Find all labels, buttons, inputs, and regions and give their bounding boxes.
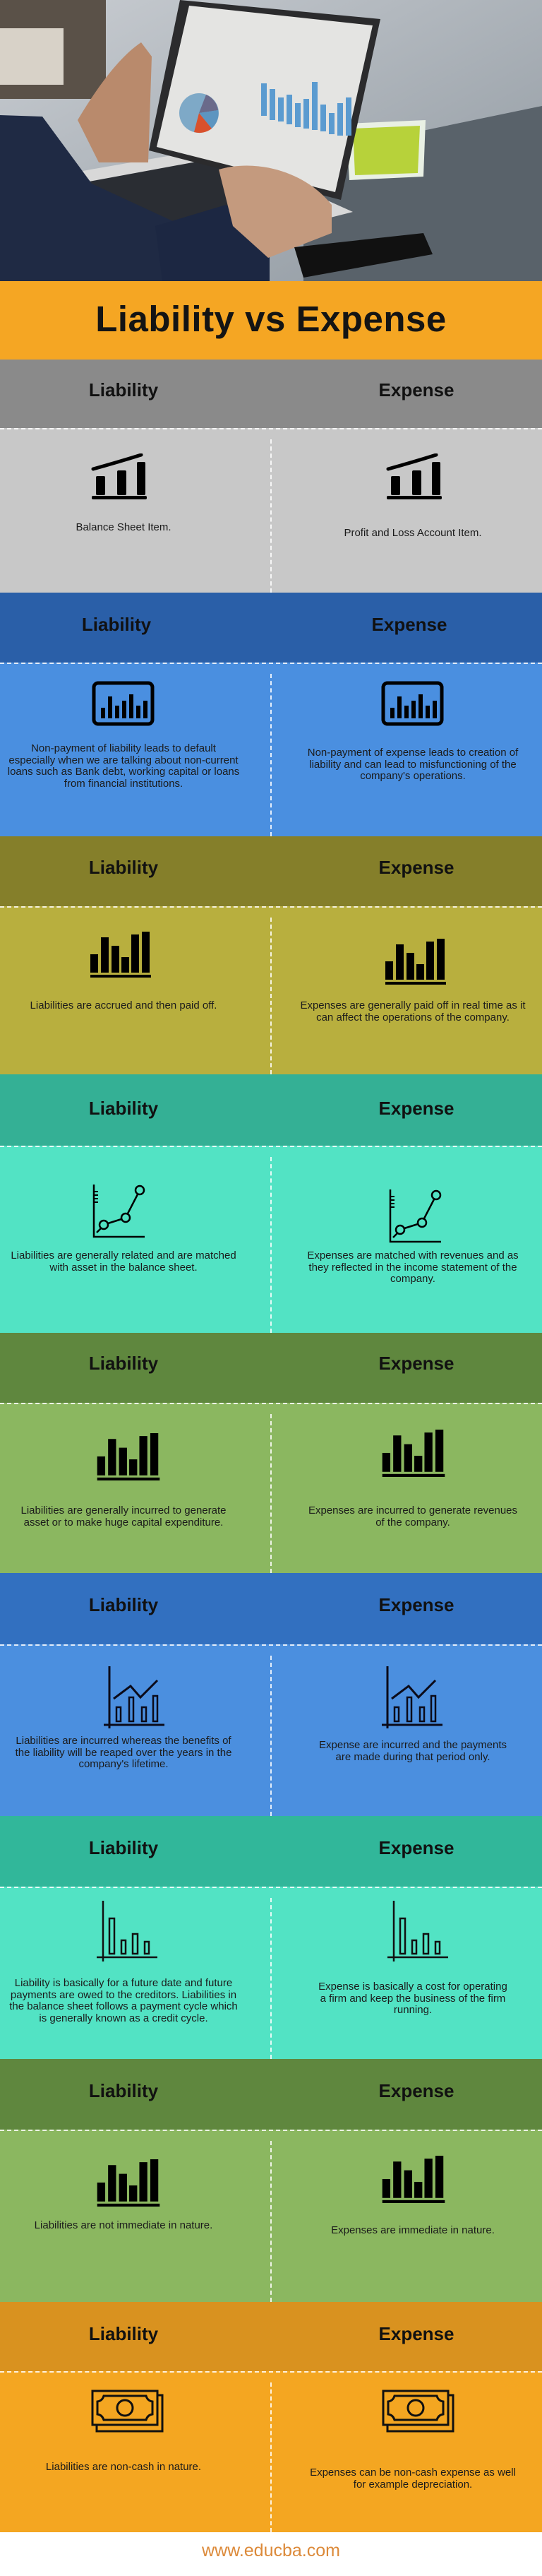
text left: Liabilities are accrued and then paid off. bbox=[30, 999, 217, 1011]
text right: Expenses are incurred to generate revenues of the company. bbox=[308, 1504, 517, 1529]
header row 8: Expense bbox=[379, 2080, 454, 2101]
icon: monitor chart left bbox=[92, 681, 154, 726]
section 4: matched with asset vs revenues bbox=[0, 1074, 542, 1333]
body row 9 bbox=[0, 2371, 542, 2532]
text left: Liability is basically for a future date and future payments are owed to the creditors. Liabilities in the balance sheet follows a payment cycle which is generally known as a credit cycle. bbox=[9, 1977, 238, 2024]
header row 8 bbox=[0, 2059, 542, 2130]
section 5: capital expenditure vs revenues bbox=[0, 1333, 542, 1573]
header row 9 bbox=[0, 2302, 542, 2371]
header row 7: Liability bbox=[89, 1837, 158, 1858]
text right: Expense is basically a cost for operating a firm and keep the business of the firm running. bbox=[318, 1981, 507, 2016]
body row 2 bbox=[0, 663, 542, 836]
header row 9: Liability bbox=[89, 2323, 158, 2344]
section 1: balance sheet vs P&L bbox=[0, 360, 542, 593]
header row 6: Liability bbox=[89, 1594, 158, 1615]
header photo: laptop with charts bbox=[0, 0, 542, 281]
icon: bar chart right bbox=[383, 2156, 445, 2203]
section 6: benefits reaped vs period only bbox=[0, 1573, 542, 1816]
header row 5: Liability bbox=[89, 1353, 158, 1374]
icon: banknotes right bbox=[383, 2390, 454, 2433]
body row 7 bbox=[0, 1887, 542, 2059]
header row 5: Expense bbox=[379, 1353, 454, 1374]
text right: Expenses are matched with revenues and as they reflected in the income statement of the company. bbox=[307, 1250, 519, 1285]
text left: Liabilities are incurred whereas the benefits of the liability will be reaped over the years in the company's lifetime. bbox=[16, 1735, 231, 1770]
text left: Liabilities are non-cash in nature. bbox=[46, 2461, 201, 2473]
header row 3: Liability bbox=[89, 857, 158, 878]
body row 8 bbox=[0, 2130, 542, 2302]
text right: Expenses are immediate in nature. bbox=[331, 2224, 495, 2236]
text left: Liabilities are generally related and are matched with asset in the balance sheet. bbox=[11, 1250, 236, 1273]
header row 1 bbox=[0, 360, 542, 428]
section 8: immediacy bbox=[0, 2059, 542, 2302]
text left: Liabilities are generally incurred to generate asset or to make huge capital expenditure. bbox=[20, 1504, 226, 1529]
icon: axis chart with trend right bbox=[382, 1666, 442, 1728]
icon: line chart right bbox=[390, 1189, 442, 1243]
icon: bar chart right bbox=[385, 939, 446, 985]
header row 2: Liability bbox=[82, 614, 151, 635]
header row 6: Expense bbox=[379, 1594, 454, 1615]
icon: outline bars left bbox=[97, 1901, 157, 1961]
icon: rising bar chart right bbox=[387, 453, 442, 499]
text right: Expenses are generally paid off in real time as it can affect the operations of the company. bbox=[300, 999, 526, 1023]
header row 1: Liability bbox=[89, 379, 158, 400]
footer: website: www.educba.com bbox=[202, 2541, 340, 2560]
text left: Balance Sheet Item. bbox=[76, 521, 171, 533]
header row 4: Expense bbox=[379, 1098, 454, 1119]
body row 6 bbox=[0, 1644, 542, 1816]
icon: bar chart left bbox=[97, 1433, 159, 1480]
icon: banknotes left bbox=[92, 2390, 164, 2433]
header row 8: Liability bbox=[89, 2080, 158, 2101]
icon: bar chart right bbox=[383, 1430, 445, 1477]
body row 1 bbox=[0, 428, 542, 593]
section 9: cash nature bbox=[0, 2302, 542, 2532]
icon: axis chart with trend left bbox=[104, 1666, 164, 1728]
header row 4: Liability bbox=[89, 1098, 158, 1119]
header row 3 bbox=[0, 836, 542, 906]
icon: bar chart left bbox=[90, 932, 151, 978]
text right: Non-payment of expense leads to creation of liability and can lead to misfunctioning of the company's operations. bbox=[308, 747, 518, 782]
title banner bbox=[0, 281, 542, 360]
text left: Liabilities are not immediate in nature. bbox=[35, 2219, 212, 2231]
header row 7 bbox=[0, 1816, 542, 1887]
section 3: accrued vs real time bbox=[0, 836, 542, 1074]
icon: monitor chart right bbox=[381, 681, 443, 726]
header row 3: Expense bbox=[379, 857, 454, 878]
text left: Non-payment of liability leads to default especially when we are talking about non-current loans such as Bank debt, working capital or loans from financial institutions. bbox=[8, 742, 239, 790]
header row 2 bbox=[0, 593, 542, 663]
body row 5 bbox=[0, 1403, 542, 1573]
header row 6 bbox=[0, 1573, 542, 1644]
icon: outline bars right bbox=[387, 1901, 448, 1961]
header row 1: Expense bbox=[379, 379, 454, 400]
body row 4 bbox=[0, 1146, 542, 1333]
header row 4 bbox=[0, 1074, 542, 1146]
header row 9: Expense bbox=[379, 2323, 454, 2344]
section 7: future date vs cost bbox=[0, 1816, 542, 2059]
header row 7: Expense bbox=[379, 1837, 454, 1858]
text right: Profit and Loss Account Item. bbox=[344, 527, 482, 539]
body row 3 bbox=[0, 906, 542, 1074]
text right: Expenses can be non-cash expense as well for example depreciation. bbox=[310, 2467, 516, 2491]
header row 2: Expense bbox=[372, 614, 447, 635]
icon: rising bar chart left bbox=[92, 453, 147, 499]
header row 5 bbox=[0, 1333, 542, 1403]
icon: bar chart left bbox=[97, 2159, 159, 2207]
title banner: Liability vs Expense bbox=[95, 299, 447, 339]
section 2: non-payment bbox=[0, 593, 542, 836]
icon: line chart left bbox=[93, 1185, 145, 1237]
text right: Expense are incurred and the payments are made during that period only. bbox=[319, 1739, 507, 1763]
